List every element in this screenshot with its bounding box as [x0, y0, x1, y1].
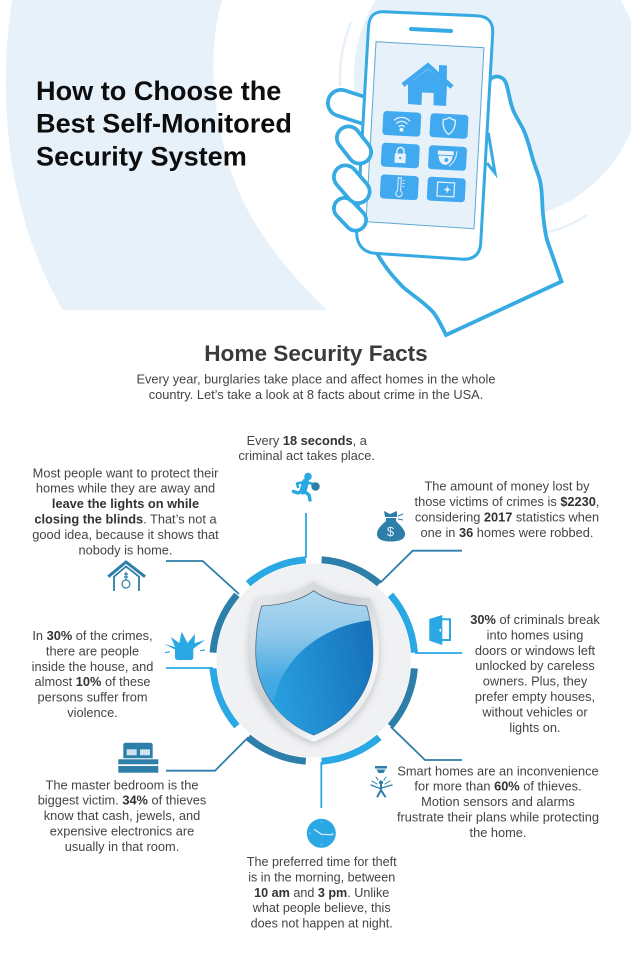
- fact: master bedroom: [38, 737, 248, 854]
- text: good idea, because it shows that: [32, 527, 219, 542]
- text: know that cash, jewels, and: [44, 808, 200, 823]
- fact: unlocked doors: [415, 612, 600, 735]
- text: criminal act takes place.: [238, 448, 375, 463]
- fingers over phone: [344, 138, 360, 220]
- text: frustrate their plans while protecting: [397, 810, 599, 824]
- icon: camera button: [428, 145, 467, 171]
- text: 30% of criminals break: [470, 612, 600, 627]
- shield: [249, 581, 380, 744]
- text: expensive electronics are: [50, 824, 194, 838]
- phone side fold: [487, 133, 495, 173]
- text: In 30% of the crimes,: [32, 628, 153, 643]
- text: Smart homes are an inconvenience: [397, 763, 599, 778]
- text: lights on.: [509, 720, 561, 735]
- text: the home.: [470, 825, 526, 840]
- icon: bed: [118, 743, 158, 773]
- icon: safe button: [427, 177, 466, 202]
- text: those victims of crimes is $2230,: [415, 494, 599, 509]
- text: nobody is home.: [79, 542, 172, 557]
- connector line: [166, 667, 213, 669]
- text: violence.: [67, 705, 118, 720]
- icon: sensor and intruder: [371, 766, 392, 796]
- icon: house with bulb: [108, 562, 145, 591]
- icon: fist burst: [164, 632, 205, 660]
- phone body: [357, 12, 493, 259]
- section heading: Home Security Facts: [204, 341, 428, 366]
- fact: preferred time: [247, 762, 397, 931]
- connector line: [415, 652, 462, 654]
- text: usually in that room.: [65, 839, 179, 854]
- icon: shield button: [429, 113, 469, 139]
- text: one in 36 homes were robbed.: [421, 525, 593, 540]
- text: considering 2017 statistics when: [415, 510, 599, 524]
- illustration: hand holding phone: [341, 12, 562, 335]
- icon: thermometer button: [380, 174, 419, 200]
- text: Every 18 seconds, a: [247, 433, 367, 448]
- text: closing the blinds. That’s not a: [34, 512, 217, 526]
- icon: clock: [307, 819, 336, 848]
- icon: lock button: [381, 143, 420, 168]
- connector line: [305, 513, 307, 558]
- fact: smart homes: [371, 727, 599, 840]
- fact: money lost: [377, 479, 599, 583]
- grey disc: [217, 564, 411, 758]
- connector line: [380, 551, 462, 583]
- connector line: [391, 727, 462, 760]
- text: leave the lights on while: [52, 496, 199, 511]
- icon: door: [429, 615, 450, 645]
- text: there are people: [46, 643, 139, 658]
- icon: running thief: [294, 473, 320, 500]
- title: How to Choose the: [36, 75, 281, 106]
- text: homes while they are away and: [36, 481, 215, 496]
- text: what people believe, this: [252, 901, 391, 915]
- text: persons suffer from: [37, 690, 148, 705]
- text: is in the morning, between: [248, 870, 395, 884]
- icon: money bag: [377, 511, 405, 542]
- fact: lights on: [32, 465, 239, 594]
- text: 10 am and 3 pm. Unlike: [254, 886, 389, 900]
- text: almost 10% of these: [35, 674, 150, 689]
- text: The preferred time for theft: [247, 855, 397, 869]
- text: unlocked by careless: [475, 658, 595, 673]
- phone screen: [366, 42, 484, 229]
- text: biggest victim. 34% of thieves: [38, 793, 206, 808]
- hand outline: [378, 77, 562, 335]
- icon: home: [403, 65, 452, 106]
- intro text: Every year, burglaries take place and affect homes in the whole: [136, 372, 496, 387]
- text: for more than 60% of thieves.: [414, 779, 582, 794]
- text: doors or windows left: [475, 643, 596, 658]
- fact: every 18 seconds: [238, 433, 375, 558]
- text: into homes using: [487, 627, 583, 642]
- icon: wifi button: [382, 111, 421, 137]
- text: does not happen at night.: [251, 917, 393, 931]
- text: owners. Plus, they: [483, 674, 588, 689]
- text: The master bedroom is the: [46, 777, 198, 792]
- text: without vehicles or: [481, 704, 588, 719]
- header background shapes: [6, 0, 631, 310]
- speaker: [411, 29, 451, 31]
- intro text: country. Let’s take a look at 8 facts about crime in the USA.: [149, 387, 483, 402]
- connector line: [320, 762, 322, 808]
- fact: people inside: [32, 628, 213, 720]
- connector line: [166, 737, 248, 771]
- title: Security System: [36, 140, 247, 171]
- icon: money bag: $: [387, 524, 395, 539]
- central shield ring: [213, 560, 414, 761]
- text: inside the house, and: [32, 659, 153, 674]
- connector line: [166, 561, 239, 594]
- ring segments: [213, 560, 414, 761]
- title: Best Self-Monitored: [36, 108, 292, 139]
- text: prefer empty houses,: [475, 689, 595, 704]
- finger 1: [341, 103, 372, 113]
- text: Most people want to protect their: [33, 465, 219, 480]
- text: The amount of money lost by: [424, 479, 590, 494]
- text: Motion sensors and alarms: [421, 794, 575, 809]
